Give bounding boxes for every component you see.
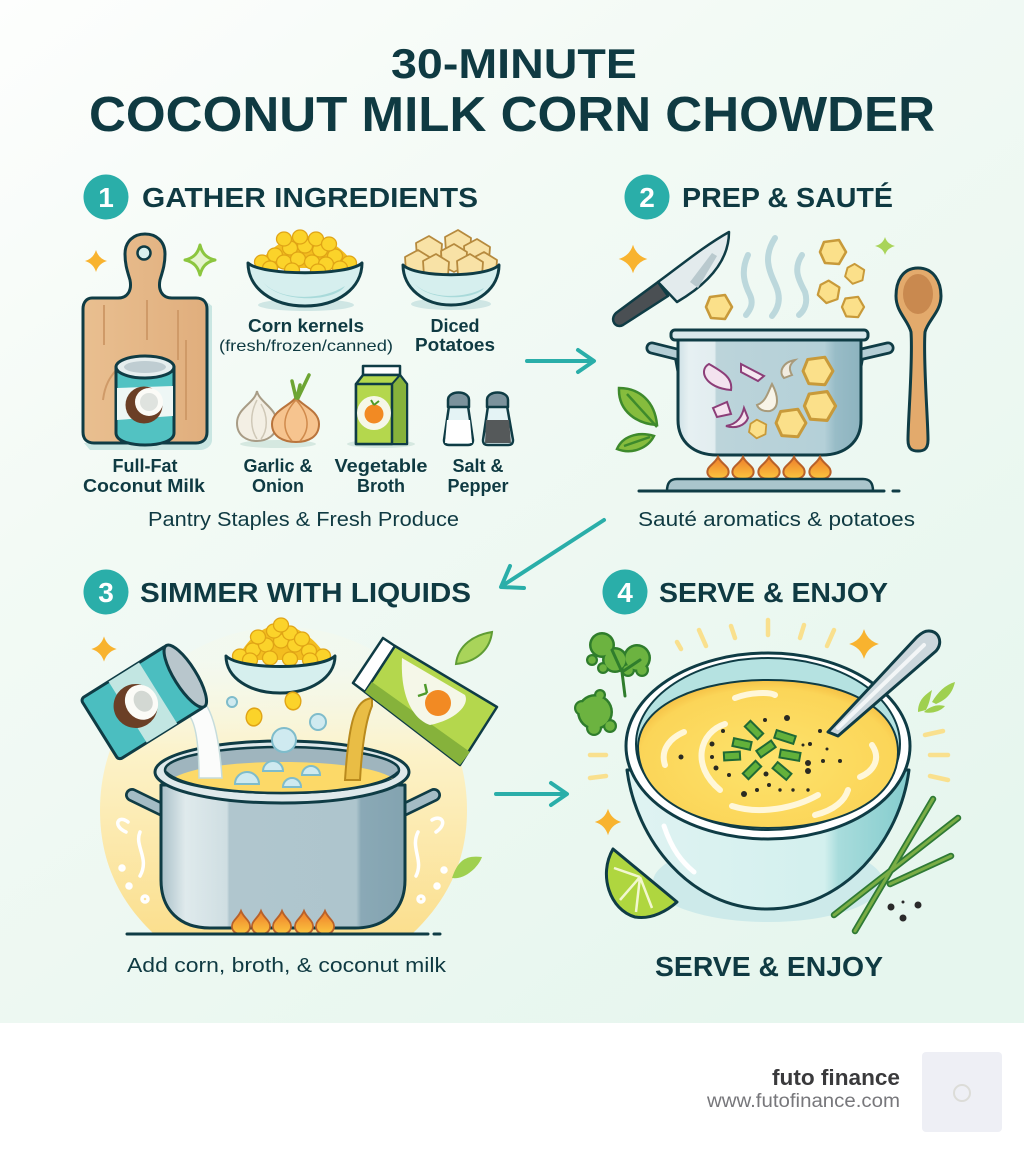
icon: burner flames [232,911,334,934]
icon: sparkle [619,245,647,273]
title: COCONUT MILK CORN CHOWDER [89,88,935,142]
footer brand text [706,1065,900,1112]
icon: pepper specks [888,900,922,922]
arrow: step 2 to 3 [501,520,604,588]
cream swirls [664,693,876,815]
icon: heat swirls [118,818,446,902]
icon: lime wedge [606,849,677,918]
icon: milk pour [184,692,222,778]
ingredient labels: (fresh/frozen/canned) [219,338,393,355]
icon: basil leaves [617,388,657,451]
icon: sparkle [91,636,117,662]
ingredient labels: Corn kernels [248,316,364,336]
step 1 heading [84,174,478,220]
icon: stock pot [132,741,434,928]
yellow glow circle [100,627,467,934]
icon: salt and pepper shakers [444,392,513,445]
ingredient labels [83,316,509,496]
step 4 heading [602,570,888,614]
icon: knife [613,232,729,326]
footer [0,1023,1024,1154]
icon: sparkle orange [85,250,107,272]
icon: green leaves [452,632,492,878]
icon: soup bowl [626,653,910,922]
title: 30-MINUTE [391,40,637,87]
ingredient labels: Vegetable [334,456,428,476]
caption: serve and enjoy: SERVE & ENJOY [655,951,883,982]
toppings: chives [724,721,801,780]
step 3 heading: 3 [98,577,114,608]
icon: tilted coconut can [81,640,214,760]
icon: tilted broth carton [353,638,497,765]
icon: corn bowl [248,230,362,311]
icon: bubbles in soup [227,697,326,787]
step 4 heading: SERVE & ENJOY [659,577,888,608]
arrow: step 3 to 4 [496,783,567,805]
step 2 heading: PREP & SAUTÉ [682,182,893,213]
icon: stove burner [639,479,899,491]
icon: broth pour [345,698,372,780]
title [89,40,935,142]
footer logo [922,1052,1002,1132]
step 1 heading: GATHER INGREDIENTS [142,182,478,213]
icon: corn bowl pouring [226,618,335,728]
ingredient labels: Onion [252,476,304,496]
icon: radiating lines [590,620,948,780]
icon: small green sparkle [875,237,895,255]
caption: saute: Sauté aromatics & potatoes [638,509,915,531]
icon: garlic and onion [237,375,319,448]
panel: step 4 serve [574,570,958,982]
pot contents: onion and garlic [704,357,836,441]
panel: step 1 gather ingredients [83,174,513,531]
ingredient labels: Pepper [447,476,509,496]
icon: potato bowl [403,230,499,310]
footer brand text: futo finance [772,1065,900,1090]
ingredient labels: Diced [430,316,480,336]
ingredient labels: Broth [357,476,405,496]
icon: green leaf sprig [918,682,955,713]
step 2 heading: 2 [639,182,655,213]
icon: burner flames [707,457,831,479]
caption: simmer: Add corn, broth, & coconut milk [127,955,447,977]
icon: sparkles [595,629,879,835]
step 1 heading: 1 [98,182,114,213]
icon: steam [744,238,806,316]
ingredient labels: Full-Fat [112,456,178,476]
toppings: pepper [678,715,842,797]
ingredient labels: Salt & [452,456,504,476]
step 3 heading: SIMMER WITH LIQUIDS [140,577,471,608]
icon: coconut milk can [116,356,174,445]
arrow: step 1 to 2 [527,350,594,372]
panel: step 2 prep and saute [613,174,941,531]
icon: saute pot [652,330,888,455]
icon: cilantro [574,632,651,736]
stove line [127,932,440,936]
icon: vegetable broth carton [347,366,415,448]
icon: cutting board [83,234,212,450]
step 2 heading [624,174,893,220]
falling corn kernels [244,690,303,728]
icon: wooden spoon [896,268,941,451]
ingredient labels: Potatoes [415,335,495,355]
icon: flying potato cubes [706,240,868,319]
footer brand text: www.futofinance.com [706,1091,900,1112]
icon: sparkle green [185,245,215,275]
caption: pantry staples: Pantry Staples & Fresh Produce [148,509,459,531]
panel: step 3 simmer [81,570,497,977]
icon: spoon [828,631,940,736]
step 4 heading: 4 [617,577,633,608]
ingredient labels: Garlic & [243,456,313,476]
ingredient labels: Coconut Milk [83,476,206,496]
icon: chives [834,799,958,931]
step 3 heading [84,570,471,614]
